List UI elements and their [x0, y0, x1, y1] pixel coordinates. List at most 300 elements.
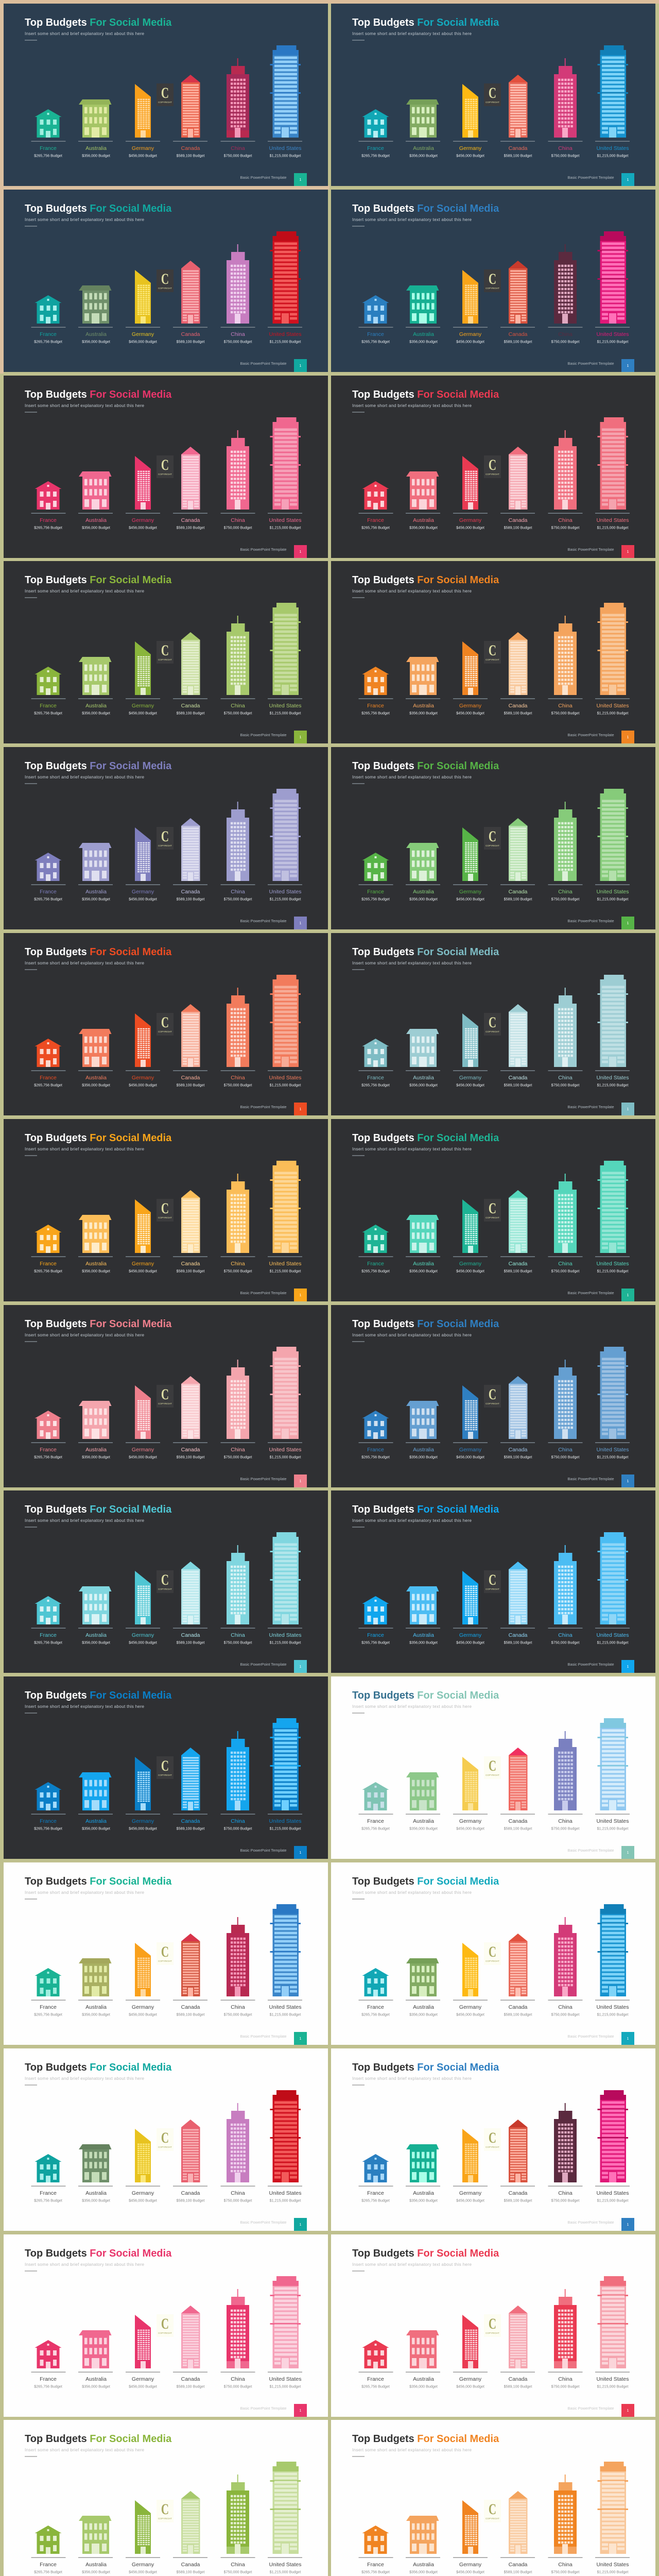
United States: United States — [269, 889, 302, 895]
watermark — [157, 455, 174, 478]
Germany: $456,000 Budget — [456, 896, 484, 902]
Canada: $589,100 Budget — [177, 2012, 204, 2016]
China: China — [231, 1261, 245, 1267]
footer: Basic PowerPoint Template — [240, 361, 286, 366]
France — [358, 1968, 393, 2016]
Canada: $589,100 Budget — [504, 2012, 532, 2016]
Germany: $456,000 Budget — [456, 2384, 484, 2388]
China: China — [231, 2004, 245, 2010]
United States: United States — [596, 1632, 629, 1638]
Canada: Canada — [509, 2376, 528, 2382]
subtitle: Insert some short and brief explanatory text about this here — [352, 774, 472, 779]
United States: $1,215,000 Budget — [270, 1826, 301, 1831]
China — [220, 430, 255, 530]
footer — [567, 731, 634, 743]
China: China — [558, 2004, 573, 2010]
footer: Basic PowerPoint Template — [240, 1848, 286, 1853]
Germany: Germany — [132, 1261, 154, 1267]
footer: 1 — [300, 2409, 302, 2413]
footer: Basic PowerPoint Template — [567, 1848, 614, 1853]
China — [220, 1545, 255, 1645]
France: $265,756 Budget — [361, 1640, 390, 1645]
Canada: $589,100 Budget — [177, 2198, 204, 2203]
Canada — [173, 75, 207, 158]
France: $265,756 Budget — [34, 1268, 62, 1274]
Germany: Germany — [132, 889, 154, 895]
watermark — [157, 1756, 174, 1779]
watermark — [484, 83, 501, 106]
Australia: $356,000 Budget — [82, 1640, 110, 1645]
United States: $1,215,000 Budget — [270, 1083, 301, 1087]
France: France — [40, 1261, 57, 1267]
United States: United States — [269, 331, 302, 337]
United States — [268, 1532, 302, 1645]
Germany — [453, 2129, 488, 2203]
Australia — [78, 1958, 113, 2016]
Germany: $456,000 Budget — [129, 154, 157, 158]
Australia — [78, 1029, 113, 1087]
France: France — [367, 2004, 384, 2010]
subtitle: Insert some short and brief explanatory text about this here — [25, 217, 144, 222]
Australia — [78, 2516, 113, 2574]
chart: buildings — [358, 1347, 630, 1459]
Australia: $356,000 Budget — [82, 1268, 110, 1274]
Canada: Canada — [181, 703, 200, 709]
panel: slide 18 — [331, 1490, 655, 1673]
footer — [567, 545, 634, 558]
footer: Basic PowerPoint Template — [567, 2034, 614, 2039]
watermark: COPYRIGHT — [158, 1774, 172, 1776]
Australia: $356,000 Budget — [82, 1455, 110, 1459]
Australia: Australia — [85, 1261, 107, 1267]
Germany — [453, 1757, 488, 1831]
Canada: Canada — [509, 1261, 528, 1267]
watermark: COPYRIGHT — [485, 1960, 499, 1962]
United States: $1,215,000 Budget — [270, 526, 301, 530]
watermark — [157, 827, 174, 850]
Canada: $589,100 Budget — [177, 1268, 204, 1274]
France: France — [40, 517, 57, 523]
footer: Basic PowerPoint Template — [567, 1662, 614, 1667]
China — [548, 58, 583, 158]
footer — [240, 1103, 307, 1115]
Australia: $356,000 Budget — [82, 896, 110, 902]
China: China — [231, 145, 245, 151]
watermark — [157, 1013, 174, 1036]
panel: slide 27 — [4, 2420, 328, 2576]
footer: 1 — [300, 736, 302, 739]
China — [220, 58, 255, 158]
United States: $1,215,000 Budget — [270, 896, 301, 902]
panel: slide 20 — [331, 1676, 655, 1859]
Germany: Germany — [132, 1818, 154, 1824]
United States — [268, 2276, 302, 2388]
footer — [567, 917, 634, 929]
Canada: Canada — [509, 2190, 528, 2196]
subtitle: Insert some short and brief explanatory text about this here — [352, 1146, 472, 1151]
France: $265,756 Budget — [361, 896, 390, 902]
subtitle: Insert some short and brief explanatory text about this here — [25, 1332, 144, 1337]
China: $750,000 Budget — [224, 2384, 252, 2388]
Canada — [500, 1934, 535, 2016]
panel: slide 19 — [4, 1676, 328, 1859]
United States — [595, 2276, 630, 2388]
France: France — [40, 1447, 57, 1453]
subtitle: Insert some short and brief explanatory text about this here — [352, 588, 472, 594]
subtitle: Insert some short and brief explanatory text about this here — [25, 1890, 144, 1895]
Australia: $356,000 Budget — [409, 2198, 438, 2203]
chart: buildings — [31, 789, 302, 902]
subtitle: Insert some short and brief explanatory text about this here — [352, 2076, 472, 2081]
panel: slide 12 — [331, 933, 655, 1115]
Germany — [126, 456, 160, 530]
footer: Basic PowerPoint Template — [567, 733, 614, 737]
title: Top Budgets For Social Media — [25, 17, 172, 28]
Australia: Australia — [85, 703, 107, 709]
Germany: $456,000 Budget — [456, 1455, 484, 1459]
subtitle: Insert some short and brief explanatory text about this here — [352, 217, 472, 222]
watermark: C — [161, 1199, 169, 1217]
watermark — [484, 1942, 501, 1965]
China: $750,000 Budget — [224, 1083, 252, 1087]
France — [31, 109, 66, 158]
China: $750,000 Budget — [224, 526, 252, 530]
China: China — [558, 2376, 573, 2382]
title: Top Budgets For Social Media — [352, 760, 499, 772]
watermark: COPYRIGHT — [158, 844, 172, 847]
footer — [240, 1846, 307, 1859]
France — [31, 2154, 66, 2203]
France: $265,756 Budget — [34, 2012, 62, 2016]
Germany: Germany — [459, 331, 482, 337]
footer: Basic PowerPoint Template — [240, 733, 286, 737]
France — [31, 1782, 66, 1831]
Canada — [500, 2120, 535, 2203]
China: $750,000 Budget — [551, 711, 579, 715]
Germany: Germany — [132, 517, 154, 523]
Canada: $589,100 Budget — [177, 1455, 204, 1459]
Australia: $356,000 Budget — [82, 526, 110, 530]
title: Top Budgets For Social Media — [25, 2433, 172, 2445]
China — [548, 2103, 583, 2203]
United States: United States — [596, 2004, 629, 2010]
Canada — [500, 261, 535, 344]
Australia: Australia — [85, 517, 107, 523]
France: $265,756 Budget — [34, 896, 62, 902]
watermark: COPYRIGHT — [485, 1402, 499, 1405]
Germany: Germany — [459, 145, 482, 151]
Australia: Australia — [413, 1447, 434, 1453]
title: Top Budgets For Social Media — [25, 574, 172, 586]
watermark — [484, 1199, 501, 1222]
Germany — [453, 1199, 488, 1274]
Canada — [173, 2306, 207, 2388]
United States: $1,215,000 Budget — [597, 896, 628, 902]
United States: $1,215,000 Budget — [597, 1083, 628, 1087]
Germany: Germany — [132, 703, 154, 709]
Germany: $456,000 Budget — [456, 339, 484, 344]
title: Top Budgets For Social Media — [25, 760, 172, 772]
France: France — [367, 1261, 384, 1267]
subtitle: Insert some short and brief explanatory text about this here — [25, 960, 144, 965]
United States: $1,215,000 Budget — [597, 1268, 628, 1274]
panel: slide 28 — [331, 2420, 655, 2576]
watermark: COPYRIGHT — [485, 2146, 499, 2148]
China — [220, 1731, 255, 1831]
subtitle: Insert some short and brief explanatory text about this here — [25, 31, 144, 36]
footer: Basic PowerPoint Template — [567, 2220, 614, 2225]
United States: $1,215,000 Budget — [597, 1640, 628, 1645]
Canada: Canada — [181, 2562, 200, 2568]
footer: 1 — [627, 1851, 629, 1855]
Canada: Canada — [181, 2004, 200, 2010]
Australia: $356,000 Budget — [409, 2012, 438, 2016]
France — [358, 295, 393, 344]
China: China — [231, 2190, 245, 2196]
China: $750,000 Budget — [224, 1455, 252, 1459]
Germany: $456,000 Budget — [129, 1083, 157, 1087]
France: France — [40, 2562, 57, 2568]
Canada — [173, 2491, 207, 2574]
Canada: Canada — [181, 1447, 200, 1453]
chart: buildings — [31, 2462, 302, 2574]
watermark: COPYRIGHT — [158, 1402, 172, 1405]
footer — [567, 1289, 634, 1301]
Canada: Canada — [181, 517, 200, 523]
watermark: COPYRIGHT — [158, 101, 172, 104]
Canada: Canada — [509, 1818, 528, 1824]
Canada: $589,100 Budget — [177, 339, 204, 344]
Germany: $456,000 Budget — [129, 2198, 157, 2203]
Germany — [453, 456, 488, 530]
footer: Basic PowerPoint Template — [567, 1477, 614, 1481]
panel: slide 16 — [331, 1305, 655, 1487]
subtitle: Insert some short and brief explanatory text about this here — [352, 1518, 472, 1523]
subtitle: Insert some short and brief explanatory text about this here — [352, 2262, 472, 2267]
United States: United States — [596, 1261, 629, 1267]
China: $750,000 Budget — [224, 2198, 252, 2203]
footer: Basic PowerPoint Template — [567, 2406, 614, 2411]
France: $265,756 Budget — [34, 526, 62, 530]
Germany — [453, 84, 488, 158]
watermark: C — [161, 84, 169, 101]
China — [548, 430, 583, 530]
China: $750,000 Budget — [551, 2570, 579, 2574]
United States: United States — [596, 1447, 629, 1453]
Germany: $456,000 Budget — [456, 526, 484, 530]
China: $750,000 Budget — [551, 2384, 579, 2388]
Australia: Australia — [413, 2376, 434, 2382]
France — [358, 667, 393, 715]
Canada: Canada — [509, 1447, 528, 1453]
United States: $1,215,000 Budget — [270, 2570, 301, 2574]
Canada: Canada — [509, 517, 528, 523]
China — [220, 988, 255, 1087]
France — [358, 2526, 393, 2574]
footer: Basic PowerPoint Template — [240, 2034, 286, 2039]
title: Top Budgets For Social Media — [25, 389, 172, 400]
Canada: $589,100 Budget — [504, 1268, 532, 1274]
France: France — [40, 1632, 57, 1638]
Germany: $456,000 Budget — [129, 1268, 157, 1274]
subtitle: Insert some short and brief explanatory text about this here — [352, 1332, 472, 1337]
subtitle: Insert some short and brief explanatory text about this here — [352, 1704, 472, 1709]
chart: buildings — [358, 2462, 630, 2574]
panel: slide 24 — [331, 2048, 655, 2231]
France: $265,756 Budget — [361, 1083, 390, 1087]
watermark: C — [489, 1199, 496, 1217]
France: France — [367, 2562, 384, 2568]
watermark — [157, 2314, 174, 2337]
subtitle: Insert some short and brief explanatory text about this here — [25, 2447, 144, 2452]
Germany — [453, 2315, 488, 2388]
United States: $1,215,000 Budget — [597, 339, 628, 344]
United States — [268, 231, 302, 344]
France — [358, 1596, 393, 1645]
footer: Basic PowerPoint Template — [567, 919, 614, 923]
United States: United States — [596, 2190, 629, 2196]
United States — [268, 2462, 302, 2574]
watermark: C — [489, 1013, 496, 1031]
panel: slide 1 — [4, 4, 328, 186]
Germany: Germany — [132, 2562, 154, 2568]
Australia: $356,000 Budget — [82, 2384, 110, 2388]
Australia: $356,000 Budget — [82, 1826, 110, 1831]
watermark — [157, 1199, 174, 1222]
China: $750,000 Budget — [551, 1455, 579, 1459]
United States: United States — [596, 2562, 629, 2568]
watermark: COPYRIGHT — [158, 287, 172, 290]
footer: Basic PowerPoint Template — [567, 1291, 614, 1295]
footer — [567, 1103, 634, 1115]
panel: slide 7 — [4, 561, 328, 743]
title: Top Budgets For Social Media — [352, 1504, 499, 1515]
China: $750,000 Budget — [224, 2570, 252, 2574]
Canada: Canada — [181, 331, 200, 337]
United States — [595, 1904, 630, 2016]
Australia: $356,000 Budget — [409, 1268, 438, 1274]
panel: slide 8 — [331, 561, 655, 743]
France — [31, 1039, 66, 1087]
United States — [268, 1161, 302, 1274]
Australia: Australia — [85, 2376, 107, 2382]
United States: United States — [269, 1818, 302, 1824]
China — [548, 1360, 583, 1459]
United States: $1,215,000 Budget — [597, 2384, 628, 2388]
title: Top Budgets For Social Media — [352, 1132, 499, 1144]
France — [358, 1782, 393, 1831]
Australia — [78, 1772, 113, 1831]
footer — [240, 731, 307, 743]
China — [220, 2103, 255, 2203]
Canada — [173, 1934, 207, 2016]
United States: $1,215,000 Budget — [270, 339, 301, 344]
United States: United States — [269, 1075, 302, 1081]
Australia: Australia — [413, 2004, 434, 2010]
France: $265,756 Budget — [34, 154, 62, 158]
panel: slide 6 — [331, 376, 655, 558]
China: China — [558, 1632, 573, 1638]
China: $750,000 Budget — [551, 1826, 579, 1831]
chart: buildings — [31, 975, 302, 1087]
watermark: COPYRIGHT — [485, 658, 499, 661]
France: $265,756 Budget — [361, 2384, 390, 2388]
title: Top Budgets For Social Media — [352, 1318, 499, 1330]
United States: $1,215,000 Budget — [597, 1826, 628, 1831]
China — [548, 988, 583, 1087]
Australia: Australia — [413, 889, 434, 895]
Australia — [78, 1215, 113, 1274]
Germany: $456,000 Budget — [456, 1826, 484, 1831]
France: France — [40, 889, 57, 895]
chart: buildings — [358, 789, 630, 902]
United States — [595, 1347, 630, 1459]
United States: $1,215,000 Budget — [597, 1455, 628, 1459]
watermark: COPYRIGHT — [485, 2517, 499, 2520]
United States: $1,215,000 Budget — [270, 154, 301, 158]
United States — [268, 789, 302, 902]
watermark: C — [489, 456, 496, 473]
Canada — [500, 1190, 535, 1274]
China: China — [558, 2190, 573, 2196]
France — [358, 1411, 393, 1459]
watermark: C — [161, 1757, 169, 1774]
watermark: C — [161, 2129, 169, 2146]
footer — [567, 1660, 634, 1673]
Canada — [500, 1562, 535, 1645]
Australia — [406, 285, 440, 344]
chart: buildings — [31, 1532, 302, 1645]
France — [358, 481, 393, 530]
United States: United States — [269, 2562, 302, 2568]
chart: buildings — [358, 45, 630, 158]
title: Top Budgets For Social Media — [352, 2062, 499, 2073]
France: $265,756 Budget — [361, 1455, 390, 1459]
watermark: C — [489, 84, 496, 101]
China: China — [231, 517, 245, 523]
footer: 1 — [627, 1480, 629, 1483]
footer — [567, 2404, 634, 2417]
China: $750,000 Budget — [551, 1083, 579, 1087]
Australia — [406, 99, 440, 158]
France: France — [367, 2190, 384, 2196]
panel: slide 10 — [331, 747, 655, 929]
chart: buildings — [31, 1347, 302, 1459]
footer — [240, 2032, 307, 2045]
United States: $1,215,000 Budget — [270, 711, 301, 715]
Germany: $456,000 Budget — [456, 711, 484, 715]
Canada: $589,100 Budget — [177, 1640, 204, 1645]
France — [358, 2340, 393, 2388]
watermark: COPYRIGHT — [158, 1960, 172, 1962]
China: China — [558, 889, 573, 895]
Australia: $356,000 Budget — [82, 2012, 110, 2016]
Germany: $456,000 Budget — [129, 2384, 157, 2388]
France — [31, 1968, 66, 2016]
China: China — [558, 1075, 573, 1081]
United States: United States — [269, 703, 302, 709]
Canada — [173, 1190, 207, 1274]
China: $750,000 Budget — [551, 2012, 579, 2016]
footer — [567, 359, 634, 372]
Germany — [126, 270, 160, 344]
title: Top Budgets For Social Media — [25, 1690, 172, 1701]
footer: Basic PowerPoint Template — [240, 1477, 286, 1481]
United States: United States — [596, 1075, 629, 1081]
Canada — [500, 2491, 535, 2574]
watermark — [157, 641, 174, 664]
Canada — [173, 818, 207, 902]
